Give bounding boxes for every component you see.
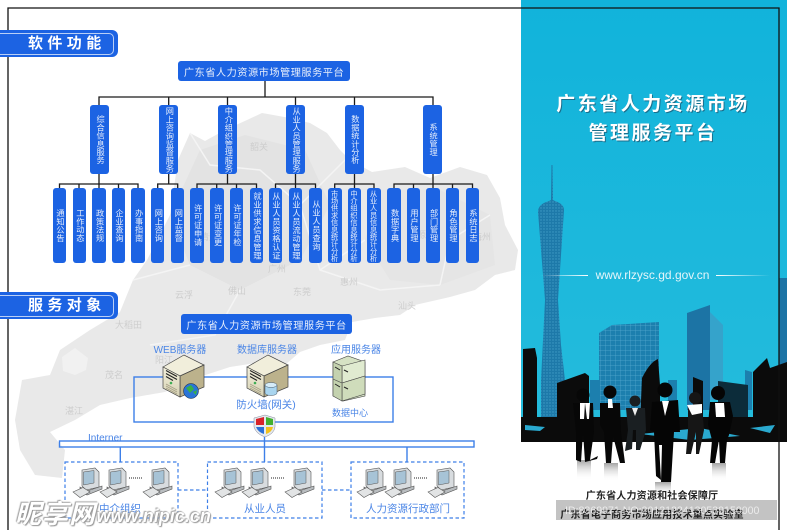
icon: WEB server with globe — [163, 355, 204, 398]
leaf: 角色管理: 角色管理 — [448, 209, 457, 242]
leaf: 数据字典: 数据字典 — [390, 209, 399, 242]
node: 中介组织管理服务 — [218, 105, 237, 174]
network frame lines — [60, 377, 474, 462]
leaf: 系统日志: 系统日志 — [468, 209, 477, 242]
leaf: 许可证变更 — [210, 188, 224, 263]
network diagram root node — [181, 314, 352, 334]
label: data centre: 数据中心 — [332, 407, 368, 418]
map: Guangdong province silhouette: 阳江 — [155, 355, 173, 365]
leaf: 中介组织信息统计分析: 中介组织信息统计分析 — [350, 190, 359, 262]
heading: software functions: 软件功能 — [28, 34, 106, 52]
people: woman in dark suit — [600, 386, 625, 463]
node: 综合信息服务 — [90, 105, 109, 174]
map: Guangdong province silhouette: 清远 — [200, 231, 218, 242]
leaf: 许可证变更: 许可证变更 — [213, 204, 222, 247]
dashed client groups and links — [65, 462, 464, 518]
leaf: 网上咨询: 网上咨询 — [154, 209, 163, 242]
map: Guangdong province silhouette: 惠州 — [340, 276, 358, 287]
node: 网上咨询监督服务 — [159, 105, 178, 174]
map: Guangdong province silhouette: 梅州 — [473, 231, 491, 242]
icons: computers of intermediary organisations — [73, 468, 172, 498]
heading: software functions — [0, 30, 118, 56]
node: 从业人员管理服务 — [286, 105, 305, 174]
reflections below the people — [577, 460, 726, 496]
icon: application server stack — [333, 356, 365, 401]
label: intermediary organisations: 中介组织 — [99, 502, 141, 515]
label: database server: 数据库服务器 — [237, 343, 297, 356]
leaf: 网上监督: 网上监督 — [174, 209, 183, 242]
leaf: 工作动态 — [72, 188, 86, 263]
cover title line 2: 管理服务平台 — [588, 121, 718, 144]
icon: Canton Tower — [538, 165, 565, 420]
website url with side rules: www.rlzysc.gd.gov.cn — [595, 268, 709, 282]
map: Guangdong province silhouette: 茂名 — [105, 369, 123, 380]
map: Guangdong province silhouette: 韶关 — [250, 141, 268, 152]
node: 中介组织管理服务: 中介组织管理服务 — [224, 107, 233, 172]
leaf: 从业人员流动管理 — [289, 188, 302, 263]
icon: database server — [247, 355, 288, 397]
leaf: 办事指南: 办事指南 — [134, 209, 143, 242]
leaf: 企业查询: 企业查询 — [114, 209, 123, 242]
watermark: site logo: 昵享网 www.nipic.cn — [15, 499, 211, 529]
leaf: 政策法规 — [92, 188, 106, 263]
leaf: 许可证年检 — [230, 188, 243, 263]
leaf: 办事指南 — [131, 188, 145, 263]
icons: computers of practitioners — [215, 468, 314, 498]
leaf: 市场供求信息统计分析 — [328, 188, 342, 263]
leaf: 通知公告 — [53, 188, 66, 263]
org chart root node: 广东省人力资源市场管理服务平台 — [184, 68, 344, 78]
organiser line 2: 广东省电子商务市场应用技术重点实验室 — [560, 508, 744, 521]
watermark id: ID:8369971 NO:20121224130539150000 — [565, 505, 759, 517]
org chart connectors — [60, 81, 472, 188]
node: 从业人员管理服务: 从业人员管理服务 — [292, 107, 301, 172]
map: Guangdong province silhouette — [15, 113, 518, 478]
leaf: 数据字典 — [387, 188, 401, 263]
map: Guangdong province silhouette: 大稻田 — [115, 319, 142, 330]
people: man in background — [625, 396, 646, 451]
watermark strip — [556, 500, 777, 520]
leaf: 角色管理 — [446, 188, 459, 263]
people: woman with white blouse, arms crossed — [686, 392, 704, 454]
node: 系统管理: 系统管理 — [429, 123, 438, 156]
map: Guangdong province silhouette: 云浮 — [175, 289, 193, 300]
org chart root node — [178, 61, 350, 81]
leaf: 从业人员资格认证 — [269, 188, 282, 263]
panel: cyan cover with skyline — [521, 0, 787, 442]
node: 数据统计分析: 数据统计分析 — [350, 115, 359, 164]
skyline: black buildings — [521, 348, 787, 442]
label: practitioners: 从业人员 — [244, 503, 286, 515]
label: application server: 应用服务器 — [331, 343, 381, 356]
leaf: 网上咨询 — [151, 188, 164, 263]
skyline: blue office towers — [590, 278, 787, 420]
people: woman in skirt with white blouse — [708, 386, 733, 463]
leaf: 从业人员信息统计分析: 从业人员信息统计分析 — [370, 190, 379, 262]
map: Guangdong province silhouette: 河源 — [408, 229, 426, 240]
leaf: 许可证年检: 许可证年检 — [232, 204, 241, 247]
leaf: 政策法规: 政策法规 — [95, 209, 104, 242]
leaf: 从业人员查询: 从业人员查询 — [311, 200, 320, 251]
map: Guangdong province silhouette: 东莞 — [293, 286, 311, 297]
leaf: 许可证申请: 许可证申请 — [193, 204, 202, 247]
leaf: 用户管理: 用户管理 — [409, 209, 418, 242]
label: Internet bus: Interner — [88, 433, 123, 444]
leaf: 网上监督 — [171, 188, 184, 263]
label: WEB server: WEB服务器 — [154, 343, 206, 356]
leaf: 从业人员查询 — [309, 188, 322, 263]
label: firewall: 防火墙(网关) — [236, 398, 296, 411]
map: Guangdong province silhouette: 广州 — [268, 263, 286, 274]
leaf: 系统日志 — [466, 188, 479, 263]
organiser line: 广东省人力资源和社会保障厅 — [586, 489, 718, 502]
leaf: 从业人员资格认证: 从业人员资格认证 — [271, 192, 280, 260]
map: Guangdong province silhouette: 汕头 — [398, 301, 416, 311]
leaf: 就业供求信息管理 — [250, 188, 263, 263]
map: Guangdong province silhouette: 湛江 — [65, 406, 83, 416]
people: man in suit with tie — [573, 388, 598, 462]
leaf: 部门管理: 部门管理 — [429, 209, 438, 242]
leaf: 许可证申请 — [190, 188, 204, 263]
network diagram root node: 广东省人力资源市场管理服务平台 — [186, 320, 347, 332]
leaf: 企业查询 — [112, 188, 125, 263]
icons: computers of HR administration — [357, 468, 457, 498]
node: 网上咨询监督服务: 网上咨询监督服务 — [165, 107, 174, 172]
leaf: 工作动态: 工作动态 — [75, 209, 84, 242]
node: 数据统计分析 — [345, 105, 364, 174]
leaf: 从业人员流动管理: 从业人员流动管理 — [291, 192, 300, 260]
leaf: 通知公告: 通知公告 — [55, 209, 64, 242]
leaf: 用户管理 — [407, 188, 420, 263]
map: Guangdong province silhouette: 佛山 — [228, 285, 246, 296]
leaf: 中介组织信息统计分析 — [348, 188, 361, 263]
icon: firewall shield — [254, 415, 275, 437]
leaf: 从业人员信息统计分析 — [367, 188, 381, 263]
heading: service targets: 服务对象 — [28, 297, 106, 314]
node: 系统管理 — [423, 105, 442, 174]
heading: service targets — [0, 292, 118, 319]
people: central man — [650, 382, 680, 482]
node: 综合信息服务: 综合信息服务 — [96, 115, 105, 164]
skyline: cyan ground flecks — [525, 425, 775, 440]
cover title line 1: 广东省人力资源市场 — [556, 92, 750, 115]
leaf: 就业供求信息管理: 就业供求信息管理 — [252, 192, 261, 260]
leaf: 市场供求信息统计分析: 市场供求信息统计分析 — [331, 190, 340, 262]
label: HR administration: 人力资源行政部门 — [366, 502, 450, 515]
leaf: 部门管理 — [426, 188, 440, 263]
